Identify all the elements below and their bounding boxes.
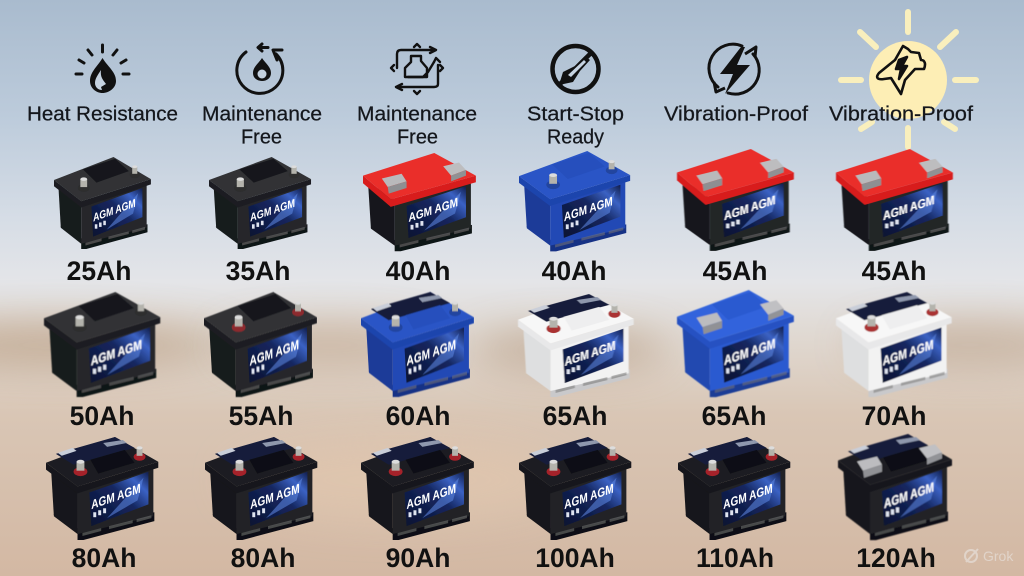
heading: maintenance free two: Free — [397, 126, 438, 148]
heading: vibration proof: Vibration-Proof — [664, 104, 808, 126]
icon: vibration proof bolt — [709, 44, 759, 94]
heading: maintenance free one: Maintenance — [202, 104, 322, 126]
label: 45Ah second: 45Ah — [862, 256, 926, 286]
label: 120Ah: 120Ah — [856, 543, 936, 573]
label: 25Ah: 25Ah — [67, 256, 131, 286]
icon: start-stop — [552, 46, 598, 92]
icon: maintenance free arrows — [391, 44, 443, 94]
battery: 100Ah — [519, 437, 631, 540]
battery: 55Ah black: AGM AGM — [250, 337, 299, 369]
battery: 70Ah white — [836, 292, 952, 397]
heading: maintenance free one: Free — [241, 126, 282, 148]
battery: 40Ah red: AGM AGM — [409, 195, 458, 225]
battery: 40Ah blue: AGM AGM — [564, 193, 613, 224]
battery: 45Ah red: AGM AGM — [724, 192, 775, 223]
heading: maintenance free two: Maintenance — [357, 104, 477, 126]
heading: maintenance free two — [357, 104, 477, 148]
battery: 45Ah red second — [836, 149, 953, 251]
icon: dog bolt — [877, 46, 925, 94]
label: 70Ah: 70Ah — [862, 401, 926, 431]
battery: 110Ah — [678, 437, 790, 540]
battery: 80Ah: AGM AGM — [91, 481, 141, 512]
battery: 50Ah black — [44, 292, 160, 397]
battery: 110Ah: AGM AGM — [723, 481, 773, 512]
battery: 60Ah blue: AGM AGM — [407, 337, 456, 369]
label: 90Ah: 90Ah — [386, 543, 450, 573]
heading: start-stop ready — [527, 104, 624, 148]
battery: 120Ah silver caps: AGM AGM — [884, 479, 934, 511]
battery: 120Ah silver caps — [838, 434, 952, 540]
heading: start-stop ready: Start-Stop — [527, 104, 624, 126]
battery: 50Ah black: AGM AGM — [91, 337, 142, 369]
label: 80Ah second: 80Ah — [231, 543, 295, 573]
battery: 70Ah white: AGM AGM — [883, 337, 933, 369]
label: 55Ah: 55Ah — [229, 401, 293, 431]
battery: 80Ah — [46, 437, 158, 540]
label: 50Ah: 50Ah — [70, 401, 134, 431]
heading: maintenance free one — [202, 104, 322, 148]
battery: 25Ah black: AGM AGM — [93, 197, 136, 225]
label: 45Ah: 45Ah — [703, 256, 767, 286]
battery: 55Ah black — [204, 292, 317, 397]
battery: 40Ah blue — [519, 151, 630, 251]
battery: 60Ah blue — [361, 292, 474, 397]
battery: 80Ah second — [205, 437, 317, 540]
battery: 45Ah red second: AGM AGM — [883, 192, 934, 223]
battery: 65Ah blue silver caps — [677, 290, 794, 397]
battery: 35Ah black — [209, 157, 311, 249]
watermark: Grok — [965, 548, 1014, 564]
label: 35Ah: 35Ah — [226, 256, 290, 286]
label: 110Ah: 110Ah — [696, 543, 774, 573]
battery: 65Ah blue silver caps: AGM AGM — [724, 336, 775, 368]
label: 65Ah blue: 65Ah — [702, 401, 766, 431]
label: 100Ah: 100Ah — [535, 543, 615, 573]
battery: 100Ah: AGM AGM — [564, 481, 614, 512]
battery: 65Ah white — [518, 294, 634, 397]
battery: 65Ah white: AGM AGM — [565, 338, 615, 369]
battery: 45Ah red — [677, 149, 794, 251]
heading: heat resistance: Heat Resistance — [27, 104, 178, 126]
heading: start-stop ready: Ready — [547, 126, 604, 148]
label: 40Ah: 40Ah — [386, 256, 450, 286]
battery: 40Ah red — [363, 153, 476, 251]
label: 80Ah: 80Ah — [72, 543, 136, 573]
battery: 80Ah second: AGM AGM — [250, 481, 300, 512]
icon: sun glow — [841, 12, 976, 147]
label: 60Ah: 60Ah — [386, 401, 450, 431]
icon: heat resistance — [76, 45, 129, 93]
heading: vibration proof sun: Vibration-Proof — [829, 104, 973, 126]
battery: 35Ah black: AGM AGM — [250, 196, 295, 225]
watermark: Grok: Grok — [983, 548, 1014, 564]
battery: 90Ah: AGM AGM — [407, 481, 456, 512]
label: 40Ah blue: 40Ah — [542, 256, 606, 286]
icon: maintenance free cycle — [237, 44, 283, 93]
battery: 90Ah — [361, 437, 474, 540]
label: 65Ah: 65Ah — [543, 401, 607, 431]
battery: 25Ah black — [54, 157, 151, 249]
